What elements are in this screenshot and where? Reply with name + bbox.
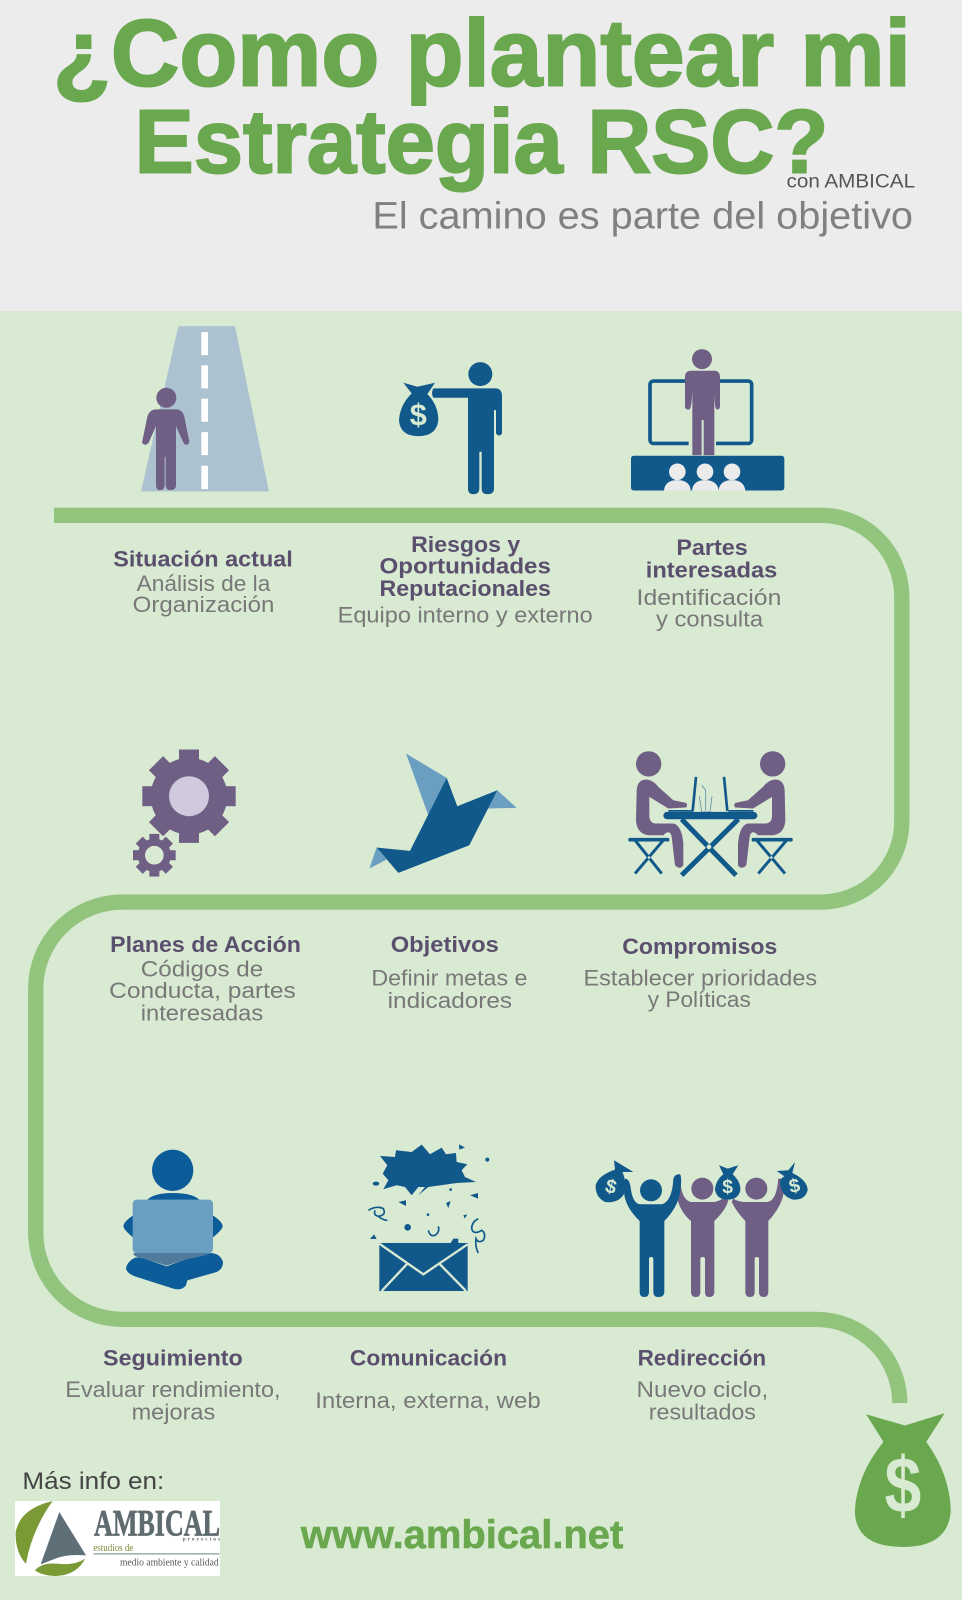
title	[53, 1, 911, 192]
logo: AMBICAL	[15, 1501, 220, 1576]
title: Estrategia RSC?	[135, 92, 828, 192]
icon: presenter on screen with audience	[631, 349, 784, 490]
more info label: Más info en:	[22, 1468, 164, 1495]
text: Situación actual: Situación actual	[113, 546, 293, 571]
text: Planes de Acción	[109, 932, 301, 1025]
text: Objetivos: Objetivos	[391, 932, 499, 957]
icon: person holding money bag	[399, 362, 502, 494]
text: Compromisos: y Políticas	[648, 987, 751, 1012]
text: Seguimiento: mejoras	[132, 1399, 215, 1424]
text: Seguimiento: Evaluar rendimiento,	[65, 1377, 281, 1402]
icon: gears	[133, 750, 236, 877]
icon: origami bird	[369, 754, 517, 873]
text: Situación actual	[113, 546, 293, 617]
text: Comunicación	[315, 1345, 541, 1413]
text: Seguimiento	[65, 1345, 281, 1424]
text: Redirección: resultados	[649, 1399, 756, 1424]
text: Riesgos y Oportunidades Reputacionales	[338, 532, 593, 627]
text: Objetivos: indicadores	[388, 988, 512, 1013]
icon: road with person	[141, 326, 269, 491]
header band	[0, 0, 962, 311]
icon: large money bag	[855, 1413, 951, 1547]
text: Partes interesadas: interesadas	[646, 558, 777, 583]
text: Partes interesadas: Partes	[676, 535, 748, 560]
text: Partes interesadas: Identificación	[637, 585, 781, 610]
text: Redirección: Redirección	[638, 1345, 766, 1370]
logo: AMBICAL: proyectos	[183, 1536, 220, 1542]
winding path	[36, 515, 902, 1403]
text: Planes de Acción: Códigos de	[141, 957, 263, 982]
icon: person with laptop	[123, 1150, 223, 1289]
text: Objetivos	[371, 932, 527, 1013]
text: Compromisos	[584, 934, 817, 1012]
byline: con AMBICAL	[787, 171, 915, 193]
title: ¿Como plantear mi	[53, 1, 911, 107]
text: Planes de Acción: interesadas	[141, 1000, 263, 1025]
icon: envelope with burst and confetti	[368, 1144, 489, 1291]
icon: two people meeting at a table	[628, 751, 793, 875]
text: Comunicación: Interna, externa, web	[315, 1388, 541, 1413]
text: Objetivos: Definir metas e	[371, 966, 527, 991]
text: Compromisos: Compromisos	[622, 934, 777, 959]
text: Redirección: Nuevo ciclo,	[637, 1377, 768, 1402]
text: Redirección	[637, 1345, 768, 1424]
icon: three people raising money bags: $	[603, 1176, 619, 1199]
logo: AMBICAL: estudios de	[93, 1543, 134, 1554]
text: Compromisos: Establecer prioridades	[584, 966, 817, 991]
text: Partes interesadas	[637, 535, 781, 632]
icon: three people raising money bags: $	[722, 1177, 733, 1198]
text: Comunicación: Comunicación	[350, 1345, 507, 1370]
website url: www.ambical.net	[300, 1513, 623, 1557]
text: Planes de Acción: Planes de Acción	[110, 932, 301, 957]
icon: three people raising money bags	[596, 1160, 808, 1297]
logo: AMBICAL: AMBICAL	[94, 1503, 220, 1544]
text: Riesgos y Oportunidades Reputacionales: Reputacionales	[379, 576, 551, 601]
text: Planes de Acción: Conducta, partes	[109, 978, 296, 1003]
icon: large money bag: $	[884, 1441, 921, 1529]
text: Situación actual: Análisis de la	[137, 571, 271, 596]
text: Riesgos y Oportunidades Reputacionales: Oportunidades	[379, 553, 551, 578]
text: Partes interesadas: y consulta	[656, 607, 764, 632]
icon: three people raising money bags: $	[787, 1175, 802, 1198]
subtitle: El camino es parte del objetivo	[372, 195, 913, 237]
logo: AMBICAL: medio ambiente y calidad	[120, 1557, 219, 1568]
text: Seguimiento: Seguimiento	[103, 1345, 243, 1370]
text: Situación actual: Organización	[133, 592, 274, 617]
text: Riesgos y Oportunidades Reputacionales: Equipo interno y externo	[338, 602, 593, 627]
text: Riesgos y Oportunidades Reputacionales: Riesgos y	[411, 532, 521, 557]
icon: person holding money bag: $	[410, 398, 427, 432]
